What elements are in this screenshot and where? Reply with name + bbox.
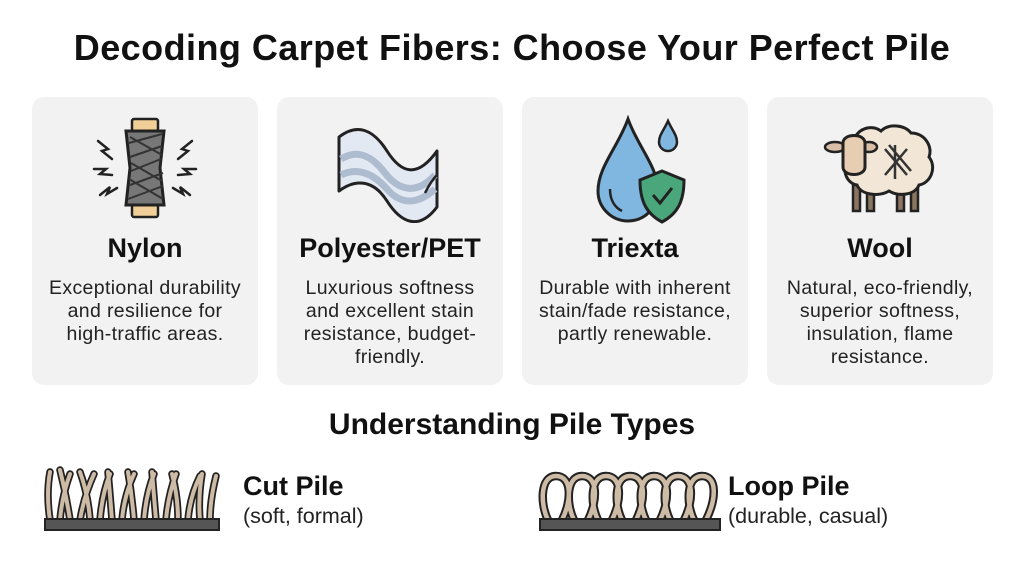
- icon: cut pile: [44, 466, 220, 531]
- text: [787, 277, 973, 368]
- label: cut pile: Cut Pile: [243, 471, 344, 501]
- icon: sheep: [824, 124, 934, 212]
- text: [304, 277, 476, 368]
- text: resistance, budget-: [304, 323, 476, 345]
- panel: wool: [767, 97, 993, 385]
- icon: loop pile: [538, 472, 721, 531]
- heading: Wool: [847, 233, 913, 263]
- text: friendly.: [355, 346, 425, 368]
- text: Exceptional durability: [49, 277, 241, 299]
- text: Luxurious softness: [306, 277, 474, 299]
- label: cut pile note: (soft, formal): [243, 504, 364, 528]
- text: and excellent stain: [306, 300, 474, 322]
- text: Durable with inherent: [539, 277, 731, 299]
- heading: Polyester/PET: [299, 233, 481, 263]
- text: insulation, flame: [807, 323, 953, 345]
- label: loop pile: Loop Pile: [728, 471, 850, 501]
- icon: drop with shield: [596, 115, 686, 224]
- text: [539, 277, 731, 345]
- text: stain/fade resistance,: [539, 300, 731, 322]
- text: resistance.: [831, 346, 929, 368]
- text: high-traffic areas.: [67, 323, 223, 345]
- panel: triexta: [522, 97, 748, 385]
- text: partly renewable.: [558, 323, 712, 345]
- panel: polyester: [277, 97, 503, 385]
- icon: spool: [92, 118, 198, 218]
- panel: nylon: [32, 97, 258, 385]
- text: [49, 277, 241, 345]
- heading: Nylon: [107, 233, 182, 263]
- icon: fabric wave: [338, 128, 438, 223]
- text: and resilience for: [68, 300, 222, 322]
- title: Decoding Carpet Fibers: Choose Your Perfect Pile: [74, 27, 950, 68]
- text: superior softness,: [800, 300, 960, 322]
- label: loop pile note: (durable, casual): [728, 504, 888, 528]
- heading: Triexta: [591, 233, 679, 263]
- subheading: Understanding Pile Types: [329, 408, 695, 441]
- text: Natural, eco-friendly,: [787, 277, 973, 299]
